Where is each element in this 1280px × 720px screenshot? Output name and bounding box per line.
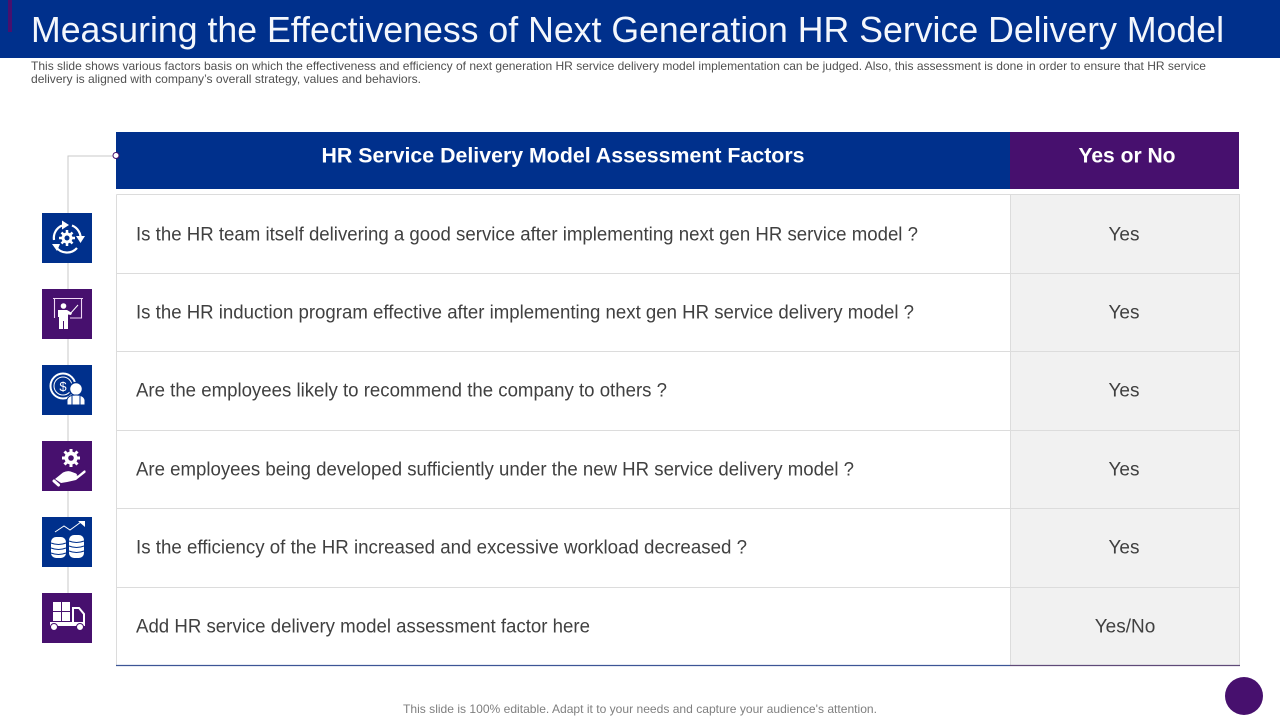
row 3: Yes [1108, 380, 1140, 402]
row 4: Are employees being developed sufficiently under the new HR service delivery model ? [136, 460, 854, 480]
row 6: Add HR service delivery model assessment factor here [136, 616, 590, 638]
table body [116, 194, 1240, 666]
table header: assessment factors [116, 132, 1010, 189]
icon: coin and person: $ [59, 379, 67, 394]
row 1: Yes [1108, 224, 1140, 246]
connector node [113, 152, 119, 158]
row 6 [136, 616, 1155, 638]
icon: hand holding gear [42, 441, 92, 491]
icon: delivery truck [42, 593, 92, 643]
icon: coin stacks and growth arrow [42, 517, 92, 567]
row 6: Yes/No [1095, 616, 1155, 638]
table header: yes or no: Yes or No [1078, 144, 1176, 168]
description text [31, 59, 1206, 86]
icon: coin and person [42, 365, 92, 415]
row 2: Is the HR induction program effective after implementing next gen HR service delivery model ? [136, 302, 914, 324]
description text: This slide shows various factors basis on which the effectiveness and efficiency of next generation HR service delivery model implementation can be judged. Also, this assessment is done in order to ensure that HR service [31, 59, 1206, 73]
row 5: Yes [1108, 538, 1140, 558]
description text: delivery is aligned with company’s overall strategy, values and behaviors. [31, 72, 421, 86]
row 1: Is the HR team itself delivering a good service after implementing next gen HR service model ? [136, 224, 918, 246]
row 5 [136, 538, 1140, 558]
row 5: Is the efficiency of the HR increased and excessive workload decreased ? [136, 538, 747, 558]
table header: yes or no [1010, 132, 1239, 189]
answer column background [1010, 194, 1240, 665]
row 3 [136, 380, 1140, 402]
footer note: This slide is 100% editable. Adapt it to your needs and capture your audience's attention. [403, 702, 877, 716]
purple circle [1225, 677, 1263, 715]
row 2: Yes [1108, 302, 1140, 324]
icon: rotating gear [42, 213, 92, 263]
connector line [68, 156, 116, 600]
row 3: Are the employees likely to recommend the company to others ? [136, 380, 667, 402]
table header: assessment factors: HR Service Delivery Model Assessment Factors [322, 144, 804, 168]
row 4: Yes [1108, 460, 1140, 480]
title: Measuring the Effectiveness of Next Generation HR Service Delivery Model [31, 9, 1224, 50]
title banner [0, 0, 1280, 58]
icon: presenter at board [42, 289, 92, 339]
